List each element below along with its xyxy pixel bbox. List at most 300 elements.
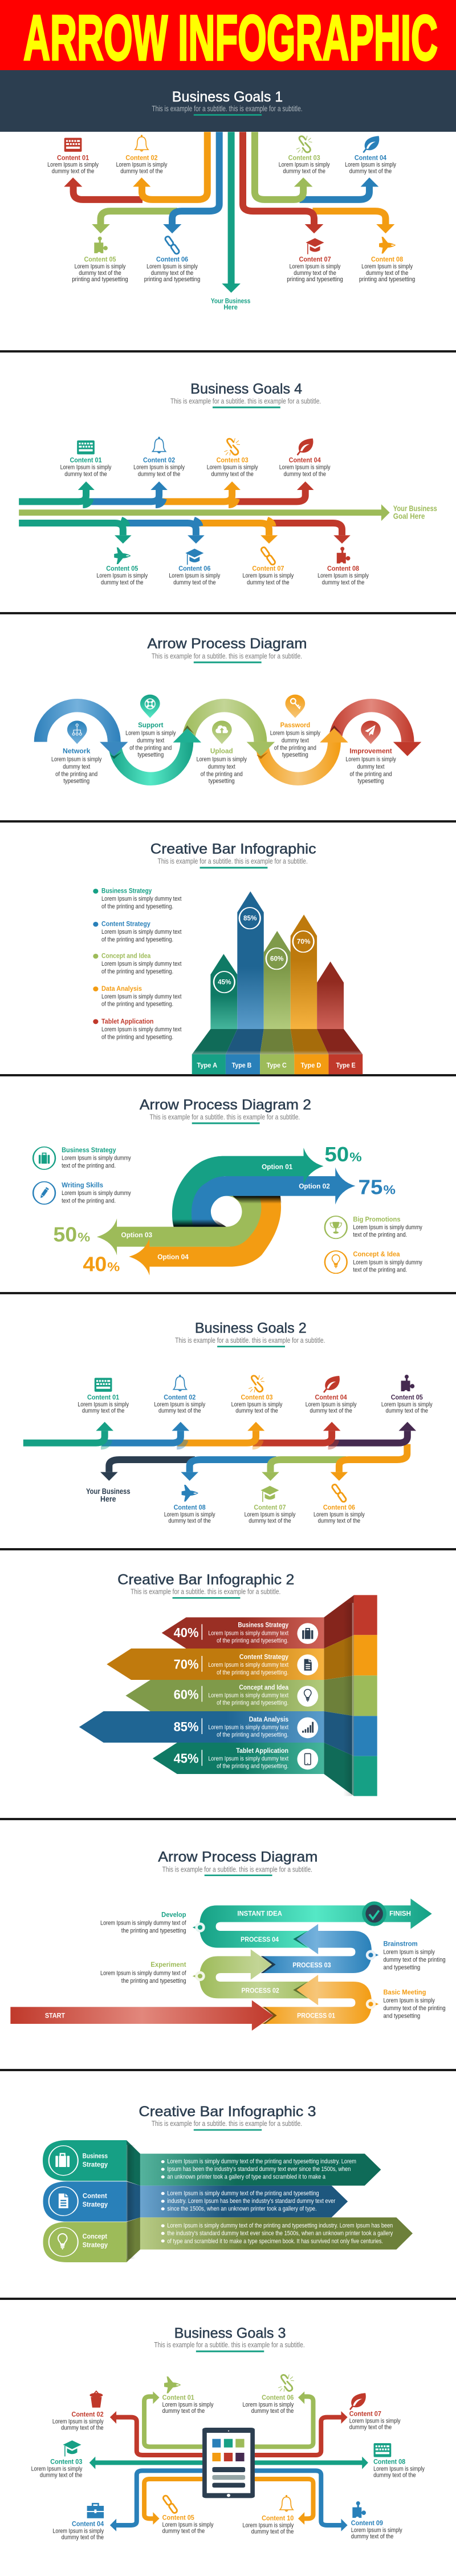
text: Content 04: Lorem Ipsum is simply xyxy=(52,2528,104,2535)
text: Content 09: dummy text of the xyxy=(351,2533,393,2540)
arrow: Content 04 red xyxy=(253,1422,340,1446)
text: Improvement xyxy=(345,748,396,785)
text: Content 09 xyxy=(351,2520,402,2540)
text: Content 05: Content 05 xyxy=(106,565,138,572)
text: Content 07: Content 07 xyxy=(349,2411,381,2418)
bar: Data Analysis 85% xyxy=(79,1711,324,1743)
item: Big Promotions: text of the printing and. xyxy=(353,1232,407,1238)
tab: Business Strategy: Business xyxy=(83,2152,108,2160)
text: Upload: typesetting xyxy=(209,777,235,785)
text: Content 04 xyxy=(279,457,331,478)
text: Content 03 xyxy=(231,1394,283,1415)
text: Content 03 xyxy=(207,457,258,478)
text: Content 08: Content 08 xyxy=(327,565,359,572)
arrow bar: teal xyxy=(140,2154,381,2186)
icon: leaf xyxy=(323,1376,340,1393)
label: FINISH: FINISH xyxy=(389,1910,411,1917)
text: Content 06 xyxy=(314,1504,365,1524)
arrow: Your Business navy xyxy=(100,1460,195,1481)
heading: Arrow Process Diagram 2 xyxy=(140,1097,311,1124)
tab: Content Strategy: Content xyxy=(83,2193,107,2200)
value: 40% orange: % xyxy=(107,1260,120,1274)
icon: graduation cap xyxy=(185,549,203,565)
label: PROCESS 03: PROCESS 03 xyxy=(292,1962,331,1969)
panel: Arrow Process Diagram xyxy=(34,635,421,785)
text: Support xyxy=(125,722,176,759)
panel: Business Goals 4 xyxy=(19,381,437,586)
heading: Business Goals 4 xyxy=(170,381,321,408)
arrow: Content 06 blue xyxy=(163,132,219,233)
legend: Content Strategy: Content Strategy xyxy=(101,921,150,928)
legend: Content Strategy: of the printing and typesetting. xyxy=(101,936,173,943)
heading: Creative Bar Infographic 3 xyxy=(139,2104,316,2131)
text: Content 08: Content 08 xyxy=(371,255,403,263)
arrow: Content 05 green xyxy=(92,211,177,233)
arrow: Process 01 orange xyxy=(262,1975,372,2024)
marker: Brainstrom xyxy=(366,1950,378,1960)
icon: toolbox xyxy=(87,2503,104,2518)
text: Content 03: dummy text of the xyxy=(283,167,325,175)
legend: Business Strategy: Business Strategy xyxy=(101,888,152,895)
text: Your Business Here: Here xyxy=(223,303,238,311)
item: Writing Skills: Writing Skills xyxy=(62,1181,103,1189)
text: Content 10: Lorem Ipsum is simply xyxy=(243,2522,294,2529)
text: Content 08 xyxy=(164,1504,215,1524)
arrow: Content 02 blue xyxy=(84,481,168,505)
bar: Type A 45% xyxy=(210,954,237,1029)
type labels: Type D xyxy=(301,1062,321,1069)
legend: Tablet Application: Lorem Ipsum is simply dummy text xyxy=(101,1026,181,1033)
text: Content 02 xyxy=(154,1394,206,1415)
text: Upload xyxy=(197,748,247,785)
arrow: Content 04 blue xyxy=(110,2470,202,2532)
text: Experiment: the printing and typesetting xyxy=(121,1978,186,1984)
text: Content 01: dummy text of the xyxy=(64,471,107,478)
legend: Tablet Application xyxy=(93,1018,181,1040)
text: Develop: the printing and typesetting xyxy=(121,1927,186,1934)
text: Content 07 xyxy=(243,565,294,586)
panel: Arrow Process Diagram (second) xyxy=(10,1849,446,2031)
text: Content 04 xyxy=(306,1394,357,1415)
heading: Creative Bar Infographic 2: This is example for a subtitle. this is example for a subtitle. xyxy=(131,1587,280,1596)
text: Content 04: dummy text of the xyxy=(349,167,392,175)
text: Content 05: dummy text of the xyxy=(101,579,144,586)
heading: Business Goals 1: This is example for a subtitle. this is example for a subtitle. xyxy=(152,105,303,113)
text: Content 08 xyxy=(373,2458,425,2478)
tab: Business Strategy xyxy=(43,2140,127,2181)
icon: bell xyxy=(280,2495,293,2512)
text: Content 04: Lorem Ipsum is simply xyxy=(306,1401,357,1408)
bar: Data Analysis 85%: 85% xyxy=(174,1720,198,1734)
icon: chain xyxy=(164,236,180,255)
text: Network: typesetting xyxy=(63,777,89,785)
panel: Creative Bar Infographic xyxy=(93,841,363,1074)
icon: leaf xyxy=(349,2393,366,2410)
text: Content 03: Lorem Ipsum is simply xyxy=(207,464,258,471)
label: Option 03: Option 03 xyxy=(121,1232,152,1239)
shadow: bottom fold xyxy=(172,1219,226,1227)
heading: Arrow Process Diagram: This is example for a subtitle. this is example for a subtitle. xyxy=(162,1865,312,1873)
text: Improvement: dummy text xyxy=(357,763,385,770)
bar: Type C 60%: 60% xyxy=(270,955,283,963)
heading: Business Goals 2: Business Goals 2 xyxy=(195,1320,307,1336)
bar: Tablet Application 45%: Lorem Ipsum is simply dummy text xyxy=(208,1755,288,1763)
panel: Creative Bar Infographic 2 xyxy=(79,1571,377,1796)
legend: Concept and Idea: of the printing and typesetting. xyxy=(101,968,173,975)
bar: Concept and Idea 60% xyxy=(125,1680,324,1711)
text: Content 03: dummy text of the xyxy=(40,2472,82,2478)
folded side panels xyxy=(324,1595,354,1796)
item: Business Strategy: Lorem Ipsum is simply dummy xyxy=(62,1155,131,1162)
text: Content 05: Lorem Ipsum is simply xyxy=(162,2521,214,2529)
text: Basic Meeting: and typesetting xyxy=(383,2012,420,2020)
arrow: Content 06 blue xyxy=(122,520,205,544)
arrow: Content 08 blue xyxy=(181,1460,276,1481)
text: Content 05: dummy text of the xyxy=(162,2528,205,2535)
icon: shuttle xyxy=(379,237,396,254)
icon: bell xyxy=(173,1375,186,1391)
tab: Concept Strategy xyxy=(43,2222,127,2262)
text: Brainstrom: Brainstrom xyxy=(383,1940,418,1947)
marker: Basic Meeting xyxy=(366,1999,378,2009)
text: Content 02 xyxy=(133,457,185,478)
item: Business Strategy: Business Strategy xyxy=(62,1147,116,1154)
text: Content 05 xyxy=(381,1394,433,1415)
pin: Password xyxy=(286,695,305,718)
item: Concept & Idea: Concept & Idea xyxy=(353,1251,400,1258)
item: Concept & Idea xyxy=(325,1251,422,1273)
arrow: Content 08 red xyxy=(269,523,351,544)
text: Content 05: printing and typesetting xyxy=(72,276,128,283)
legend: Business Strategy xyxy=(93,888,181,910)
icon: shuttle xyxy=(182,1485,198,1501)
text: Support: dummy text xyxy=(137,737,164,744)
arrow: main green xyxy=(19,504,390,521)
legend: Tablet Application: Tablet Application xyxy=(101,1018,153,1026)
text: Upload: Lorem Ipsum is simply xyxy=(197,756,247,763)
text: Content 05 xyxy=(72,255,128,283)
text: Content 05: Content 05 xyxy=(162,2514,194,2522)
text: Support: Support xyxy=(138,722,164,729)
text: Password: Password xyxy=(280,722,310,729)
text: Content 02: Lorem Ipsum is simply xyxy=(133,464,185,471)
text: Content 08: Lorem Ipsum is simply xyxy=(361,262,413,270)
arrow: Content 03 green xyxy=(255,132,312,200)
icon: graduation cap xyxy=(260,1486,279,1502)
panel: Business Goals 2 xyxy=(23,1320,433,1524)
heading: Creative Bar Infographic 2: Creative Bar Infographic 2 xyxy=(117,1571,294,1587)
arrow: Option 01 teal xyxy=(172,1148,323,1227)
arrow: Content 10 orange xyxy=(255,2479,313,2525)
text: Content 03 xyxy=(279,153,330,175)
text: Content 04 xyxy=(345,153,396,175)
panel: Creative Bar Infographic 3 xyxy=(43,2104,413,2262)
arrow: Content 03 orange xyxy=(177,1422,264,1446)
text: Content 07: Content 07 xyxy=(254,1504,286,1511)
heading: Arrow Process Diagram xyxy=(147,635,307,663)
text: Content 07: Content 07 xyxy=(299,255,331,263)
text: Content 03: Content 03 xyxy=(288,153,320,161)
bar: Tablet Application 45% xyxy=(153,1743,324,1774)
value: 50% green: 50 xyxy=(53,1223,77,1246)
text: Basic Meeting: Basic Meeting xyxy=(383,1988,426,1996)
text: Content 05: Content 05 xyxy=(391,1394,423,1402)
legend: Content Strategy: Lorem Ipsum is simply dummy text xyxy=(101,929,181,935)
heading: Creative Bar Infographic 3: This is example for a subtitle. this is example for a subtitle. xyxy=(152,2119,302,2128)
item: Writing Skills: Lorem Ipsum is simply dummy xyxy=(62,1190,131,1197)
text: Content 03: dummy text of the xyxy=(211,471,254,478)
arrow: Option 03 green xyxy=(97,1196,261,1255)
panel: Business Goals 1 xyxy=(0,70,456,311)
text: Content 04: Content 04 xyxy=(315,1394,347,1402)
text: Content 05 xyxy=(162,2514,214,2535)
icon: puzzle xyxy=(352,2501,366,2520)
label: START: START xyxy=(45,2012,65,2020)
check badge xyxy=(362,1901,386,1926)
heading: Arrow Process Diagram: Arrow Process Diagram xyxy=(147,635,307,651)
arrow: Content 05 orange xyxy=(144,2479,202,2525)
item: Big Promotions: Big Promotions xyxy=(353,1216,401,1223)
text: Content 01: Lorem Ipsum is simply xyxy=(162,2401,214,2408)
text: Content 02: dummy text of the xyxy=(120,167,163,175)
arrow head: Option 01 xyxy=(304,1148,323,1185)
arrow: Content 01 teal xyxy=(23,1422,113,1446)
item: Writing Skills xyxy=(33,1181,131,1204)
arrow: Content 07 red xyxy=(243,132,323,233)
icon: puzzle xyxy=(401,1375,414,1394)
legend: Tablet Application: of the printing and typesetting. xyxy=(101,1034,173,1040)
heading: Business Goals 2 xyxy=(175,1320,325,1347)
text: Content 06: Content 06 xyxy=(156,255,188,263)
floor panels xyxy=(192,1029,363,1054)
text: Content 08 xyxy=(359,255,415,283)
arrow: Content 02 red xyxy=(110,2411,202,2455)
text: Content 03: Lorem Ipsum is simply xyxy=(279,161,330,168)
arrow: Process 02 green xyxy=(199,1949,317,1998)
text: Content 02: dummy text of the xyxy=(138,471,180,478)
pin: Improvement xyxy=(361,720,381,744)
value: 50% teal: 50 xyxy=(324,1143,349,1166)
text: Content 01 xyxy=(47,153,99,175)
arc: red arrow xyxy=(329,699,421,756)
text: Content 04: dummy text of the xyxy=(283,471,326,478)
type labels: Type B xyxy=(232,1062,251,1069)
text: Content 08: Content 08 xyxy=(174,1504,206,1511)
text: Experiment xyxy=(100,1961,186,1984)
text: Content 02 xyxy=(116,153,168,175)
icon: broken link xyxy=(249,1375,264,1392)
tab: Content Strategy: Strategy xyxy=(83,2201,108,2209)
icon: bell xyxy=(153,437,166,453)
text: Content 01: Lorem Ipsum is simply xyxy=(60,464,112,471)
heading: Business Goals 3: Business Goals 3 xyxy=(174,2325,286,2341)
text: Content 02: Content 02 xyxy=(164,1394,196,1402)
text: Content 01 xyxy=(60,457,112,478)
pin: Upload xyxy=(212,720,232,744)
tablet illustration xyxy=(202,2428,255,2498)
text: Content 08: Lorem Ipsum is simply xyxy=(317,572,369,579)
arrow: Content 03 and 08 teal xyxy=(89,2457,368,2469)
label: PROCESS 04: PROCESS 04 xyxy=(241,1936,279,1943)
bar: Type D 70% xyxy=(291,914,317,1029)
text: Upload: of the printing and xyxy=(201,771,243,777)
arrow: Content 02 orange xyxy=(133,132,207,200)
text: Content 01: Content 01 xyxy=(162,2394,194,2401)
bar: Data Analysis 85%: Lorem Ipsum is simply dummy text xyxy=(208,1724,288,1731)
text: Content 02: Lorem Ipsum is simply xyxy=(116,161,168,168)
text: Content 07: dummy text of the xyxy=(294,269,336,277)
text: Content 04: Content 04 xyxy=(72,2521,104,2528)
bar: Concept and Idea 60%: of the printing and typesetting. xyxy=(217,1699,288,1707)
bar: Business Strategy 40% xyxy=(162,1617,324,1649)
tab: Business Strategy: Strategy xyxy=(83,2161,108,2168)
bar: Tablet Application 45%: Tablet Application xyxy=(236,1747,288,1755)
bar: Content Strategy 70%: 70% xyxy=(174,1658,198,1672)
tab: Content Strategy xyxy=(43,2181,127,2222)
type labels: Type C xyxy=(267,1062,287,1069)
icon: bell xyxy=(135,135,148,152)
icon: shuttle xyxy=(114,548,131,564)
arrow: Content 01 green xyxy=(144,2391,202,2447)
text: Content 02: Lorem Ipsum is simply xyxy=(52,2418,104,2425)
text: Support: of the printing and xyxy=(129,744,172,751)
text: Experiment: Experiment xyxy=(150,1961,186,1969)
text: Content 08: dummy text of the xyxy=(373,2472,416,2478)
text: Content 01 xyxy=(162,2394,214,2415)
text: Content 03: Content 03 xyxy=(217,457,249,464)
arrow bar: blue: Lorem Ipsum is simply dummy text of the printing and typesetting xyxy=(167,2190,319,2197)
value: 50% green: % xyxy=(78,1230,90,1245)
text: Improvement: Lorem Ipsum is simply xyxy=(345,756,396,763)
heading: Creative Bar Infographic xyxy=(150,841,316,869)
text: Content 01: Content 01 xyxy=(87,1394,119,1402)
text: Brainstrom: and typesetting xyxy=(383,1964,420,1971)
icon: leaf xyxy=(297,439,313,456)
heading: Creative Bar Infographic 3: Creative Bar Infographic 3 xyxy=(139,2104,316,2119)
text: Your Business Here: Your Business xyxy=(211,297,250,305)
text: Content 01: dummy text of the xyxy=(52,167,94,175)
text: Network: Lorem Ipsum is simply xyxy=(51,756,102,763)
text: Content 06: Lorem Ipsum is simply xyxy=(169,572,221,579)
text: Content 06: dummy text of the xyxy=(151,269,193,277)
icon: keyboard xyxy=(64,138,82,152)
text: Content 06: Lorem Ipsum is simply xyxy=(314,1511,365,1518)
text: Content 06: Content 06 xyxy=(323,1504,355,1511)
text: Content 02: Content 02 xyxy=(143,457,175,464)
text: Content 10: Content 10 xyxy=(262,2514,294,2522)
text: Content 08: Content 08 xyxy=(373,2458,405,2465)
heading: Arrow Process Diagram: Arrow Process Diagram xyxy=(158,1849,317,1865)
value: 50% teal: % xyxy=(349,1151,362,1164)
arrow bar: blue xyxy=(140,2186,348,2217)
text: Content 07: printing and typesetting xyxy=(287,276,343,283)
text: Content 03: Lorem Ipsum is simply xyxy=(231,1401,283,1408)
text: Content 04: Content 04 xyxy=(289,457,321,464)
text: Content 08: dummy text of the xyxy=(366,269,408,277)
text: Content 06: dummy text of the xyxy=(318,1517,360,1524)
text: Content 02: dummy text of the xyxy=(158,1407,201,1415)
text: Your Business Here: Your Business xyxy=(86,1487,131,1496)
arrow: Content 01 red xyxy=(64,177,142,200)
text: Experiment: Lorem Ipsum is simply dummy text of xyxy=(100,1970,186,1976)
arrow: Content 08 orange xyxy=(312,211,394,233)
heading: Business Goals 4: Business Goals 4 xyxy=(190,381,302,396)
text: Network xyxy=(51,748,102,785)
text: Content 01: Content 01 xyxy=(70,457,102,464)
icon: broken link xyxy=(296,136,312,153)
icon: keyboard xyxy=(95,1378,112,1392)
text: Content 02: Lorem Ipsum is simply xyxy=(154,1401,206,1408)
type labels xyxy=(192,1054,363,1074)
heading: Creative Bar Infographic: Creative Bar Infographic xyxy=(150,841,316,857)
text: Network: of the printing and xyxy=(55,771,97,777)
text: Content 02: Content 02 xyxy=(72,2411,104,2418)
icon: puzzle xyxy=(94,237,108,255)
heading: Business Goals 3 xyxy=(154,2325,305,2352)
text: Content 07: Lorem Ipsum is simply xyxy=(243,572,294,579)
legend: Concept and Idea: Concept and Idea xyxy=(101,953,150,960)
item: Business Strategy: text of the printing and. xyxy=(62,1163,116,1169)
arrow: your business teal xyxy=(222,132,241,293)
bar: Data Analysis 85%: of the printing and typesetting. xyxy=(217,1731,288,1739)
text: Support: typesetting xyxy=(137,751,164,759)
text: Improvement: of the printing and xyxy=(350,771,392,777)
text: Improvement: typesetting xyxy=(358,777,384,785)
bar: Business Strategy 40%: Business Strategy xyxy=(238,1622,288,1629)
text: Content 07: Lorem Ipsum is simply xyxy=(349,2417,401,2425)
text: Content 05: Lorem Ipsum is simply xyxy=(75,262,126,270)
arrow: Content 01 teal xyxy=(19,481,95,505)
arrow: Instant Idea to Finish xyxy=(199,1898,432,1948)
text: Upload: Upload xyxy=(210,748,233,755)
legend: Content Strategy xyxy=(93,921,181,943)
arrow: Content 06 green xyxy=(255,2391,313,2447)
text: Content 03 xyxy=(31,2458,83,2478)
legend: Concept and Idea: Lorem Ipsum is simply dummy text xyxy=(101,961,181,967)
bar: Content Strategy 70%: of the printing and typesetting. xyxy=(217,1669,288,1676)
icon: graduation cap xyxy=(63,2440,82,2456)
text: Password xyxy=(270,722,321,759)
arc: teal arrow xyxy=(108,726,201,785)
bar: Type C 60% xyxy=(264,931,291,1029)
icon: chain xyxy=(331,1484,347,1502)
bar: Concept and Idea 60%: Lorem Ipsum is simply dummy text xyxy=(208,1692,288,1699)
text: Content 05: Content 05 xyxy=(84,255,116,263)
text: Content 03: Lorem Ipsum is simply xyxy=(31,2465,83,2472)
text: Content 04: Content 04 xyxy=(355,153,386,161)
text: Content 02: Content 02 xyxy=(125,153,158,161)
icon: chain xyxy=(162,2495,178,2514)
type labels: Type E xyxy=(336,1062,356,1069)
panel: Business Goals 3 xyxy=(31,2325,425,2541)
bar: Tablet Application 45%: of the printing and typesetting. xyxy=(217,1763,288,1770)
label: Option 01: Option 01 xyxy=(262,1164,292,1171)
text: Brainstrom xyxy=(383,1940,446,1971)
text: Content 06 xyxy=(144,255,200,283)
text: Content 02: dummy text of the xyxy=(61,2424,104,2431)
text: Content 06 xyxy=(243,2394,294,2415)
heading: Business Goals 1 xyxy=(152,89,303,116)
text: Content 09: Content 09 xyxy=(351,2520,383,2527)
type labels: Type A xyxy=(197,1062,217,1069)
text: Content 07: Lorem Ipsum is simply xyxy=(245,1511,296,1518)
text: Content 04: Lorem Ipsum is simply xyxy=(345,161,396,168)
panel: Arrow Process Diagram 2 xyxy=(33,1097,422,1275)
arrow: Content 05 purple xyxy=(329,1422,416,1443)
icon: broken link xyxy=(225,439,240,455)
label: Option 02: Option 02 xyxy=(299,1183,330,1190)
text: Password: typesetting xyxy=(282,751,308,759)
